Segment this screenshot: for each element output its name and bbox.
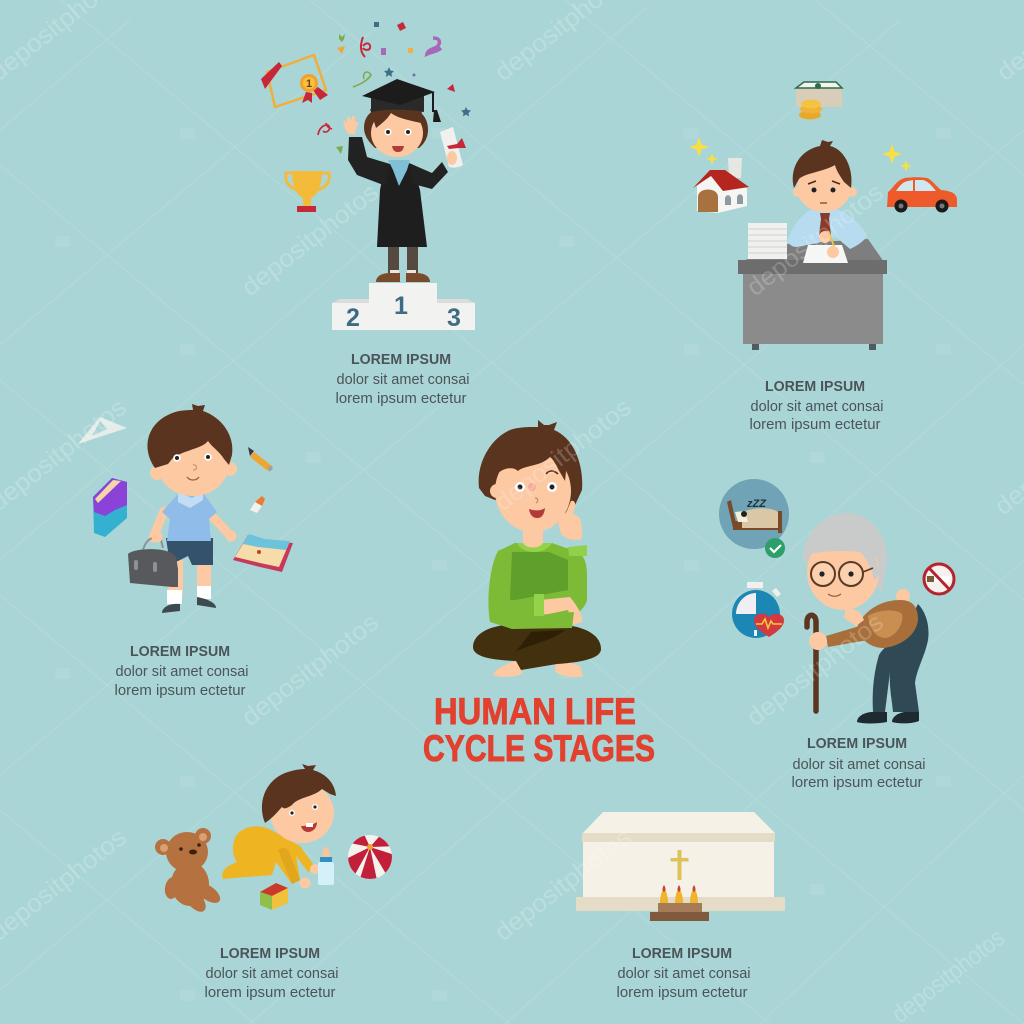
- label: elderly: lorem ipsum ectetur: [792, 775, 923, 791]
- label: schoolboy: lorem ipsum ectetur: [114, 683, 246, 699]
- label: schoolboy: [114, 644, 248, 699]
- sweater: [488, 543, 587, 629]
- watermarks: depositphotos: [741, 608, 889, 732]
- label: worker: lorem ipsum ectetur: [750, 417, 881, 433]
- watermarks: depositphotos: [236, 178, 384, 302]
- title: [423, 691, 655, 769]
- icon: ball: [348, 835, 392, 879]
- stage: thinking adult (centre): [423, 420, 655, 769]
- icon: eraser: [250, 496, 265, 513]
- arm: [278, 848, 300, 884]
- icon: cross: [670, 850, 688, 880]
- label: graduate: dolor sit amet consai: [336, 372, 470, 388]
- icon: pencil: [248, 447, 273, 472]
- candles: [660, 885, 698, 903]
- back hand: [896, 589, 910, 603]
- watermarks: depositphotos: [741, 178, 889, 302]
- head: [803, 513, 887, 626]
- icon: stopwatch with heart: [732, 582, 784, 638]
- icon: open book: [233, 534, 293, 572]
- arm and sweater: [826, 600, 918, 648]
- coffin: [576, 812, 785, 911]
- head: [370, 109, 423, 157]
- hair back: [479, 420, 582, 516]
- shorts: [166, 538, 213, 565]
- label: graduate: LOREM IPSUM: [351, 352, 451, 368]
- confetti: [318, 22, 471, 154]
- label: graduate: [336, 352, 470, 407]
- trophy: [286, 171, 329, 212]
- icon: sleep: [719, 479, 789, 549]
- certificate with medal: [261, 55, 328, 107]
- head: [485, 433, 571, 532]
- title: CYCLE STAGES: [423, 728, 655, 769]
- desk: [738, 239, 887, 350]
- body: [222, 826, 316, 884]
- thinking hand: [558, 501, 587, 556]
- hands: [300, 878, 310, 888]
- trousers: [873, 604, 929, 712]
- figure: schoolboy: [128, 404, 237, 613]
- figure: graduate: [343, 79, 466, 282]
- feet: [493, 658, 583, 677]
- head: [148, 404, 237, 496]
- stage: baby: [155, 764, 398, 1001]
- hand on cane: [809, 632, 827, 650]
- label: graduate: lorem ipsum ectetur: [336, 391, 467, 407]
- icon: check badge: [765, 538, 785, 558]
- cane: [807, 615, 816, 711]
- label: baby: lorem ipsum ectetur: [204, 985, 336, 1001]
- arms and hands: [343, 116, 448, 189]
- figure: seated person: [473, 420, 601, 677]
- label: baby: LOREM IPSUM: [220, 946, 320, 962]
- label: worker: dolor sit amet consai: [750, 399, 884, 415]
- stage: schoolboy: [78, 404, 293, 699]
- label: coffin: [616, 946, 750, 1001]
- icon: alphabet block: [260, 883, 288, 910]
- stage: coffin: [576, 812, 785, 1001]
- contract paper: [803, 245, 848, 263]
- collar: [178, 491, 203, 508]
- hand with pencil: [819, 231, 839, 258]
- icon: teddy bear: [155, 828, 223, 916]
- label: elderly: [792, 736, 926, 791]
- icon: money and coins: [796, 82, 842, 120]
- watermarks: depositphotos: [489, 823, 637, 947]
- head: [262, 764, 336, 843]
- tie: [819, 213, 831, 239]
- arm folded: [492, 594, 582, 629]
- paper stack: [748, 223, 787, 259]
- title: HUMAN LIFE: [434, 691, 636, 732]
- figure: office worker: [787, 140, 867, 263]
- legs and socks: [162, 560, 216, 613]
- label: elderly: dolor sit amet consai: [792, 757, 926, 773]
- stage: worker: [689, 82, 957, 433]
- label: baby: dolor sit amet consai: [206, 966, 338, 982]
- podium numbers: 3: [447, 304, 461, 332]
- altar steps: [650, 903, 709, 921]
- collar: [388, 160, 410, 186]
- certificate with medal: 1: [306, 78, 312, 90]
- figure: crawling baby: [222, 764, 336, 888]
- icon: car: [887, 177, 957, 212]
- shirt: [162, 494, 217, 541]
- icon: sparkles left: [689, 137, 718, 165]
- shoes: [857, 712, 887, 724]
- diploma: [440, 127, 466, 168]
- label: worker: LOREM IPSUM: [765, 379, 865, 395]
- label: baby: [204, 946, 338, 1001]
- label: elderly: LOREM IPSUM: [807, 736, 907, 752]
- icon: closed book: [93, 478, 127, 537]
- icon: no smoking: [924, 564, 954, 594]
- hair: [364, 106, 428, 148]
- arms: [153, 511, 229, 538]
- shirt: [787, 209, 867, 249]
- icon: baby bottle: [318, 847, 334, 885]
- icon: house: [693, 158, 749, 213]
- trousers: [473, 625, 601, 670]
- podium numbers: 2: [346, 304, 360, 332]
- stage: elderly: [719, 479, 954, 791]
- gown: [377, 164, 427, 247]
- icon: sleep: zZZ: [746, 498, 767, 510]
- podium numbers: 1: [394, 292, 408, 320]
- neck and collar: [517, 530, 552, 552]
- podium: [332, 283, 475, 332]
- icon: sparkles right: [882, 144, 912, 172]
- graduation cap: [362, 79, 441, 122]
- watermarks: depositphotos: [489, 393, 637, 517]
- shoes and legs: [376, 246, 430, 282]
- school bag: [128, 532, 178, 587]
- icon: set square: [78, 417, 127, 444]
- head: [793, 140, 857, 212]
- label: worker: [750, 379, 884, 433]
- figure: elderly man: [803, 513, 929, 724]
- label: coffin: LOREM IPSUM: [632, 946, 732, 962]
- stage: graduate: [261, 22, 475, 407]
- label: coffin: lorem ipsum ectetur: [616, 985, 748, 1001]
- label: schoolboy: dolor sit amet consai: [116, 664, 248, 680]
- label: schoolboy: LOREM IPSUM: [130, 644, 230, 660]
- podium numbers: [346, 292, 461, 332]
- label: coffin: dolor sit amet consai: [618, 966, 750, 982]
- watermarks: depositphotos: [236, 608, 384, 732]
